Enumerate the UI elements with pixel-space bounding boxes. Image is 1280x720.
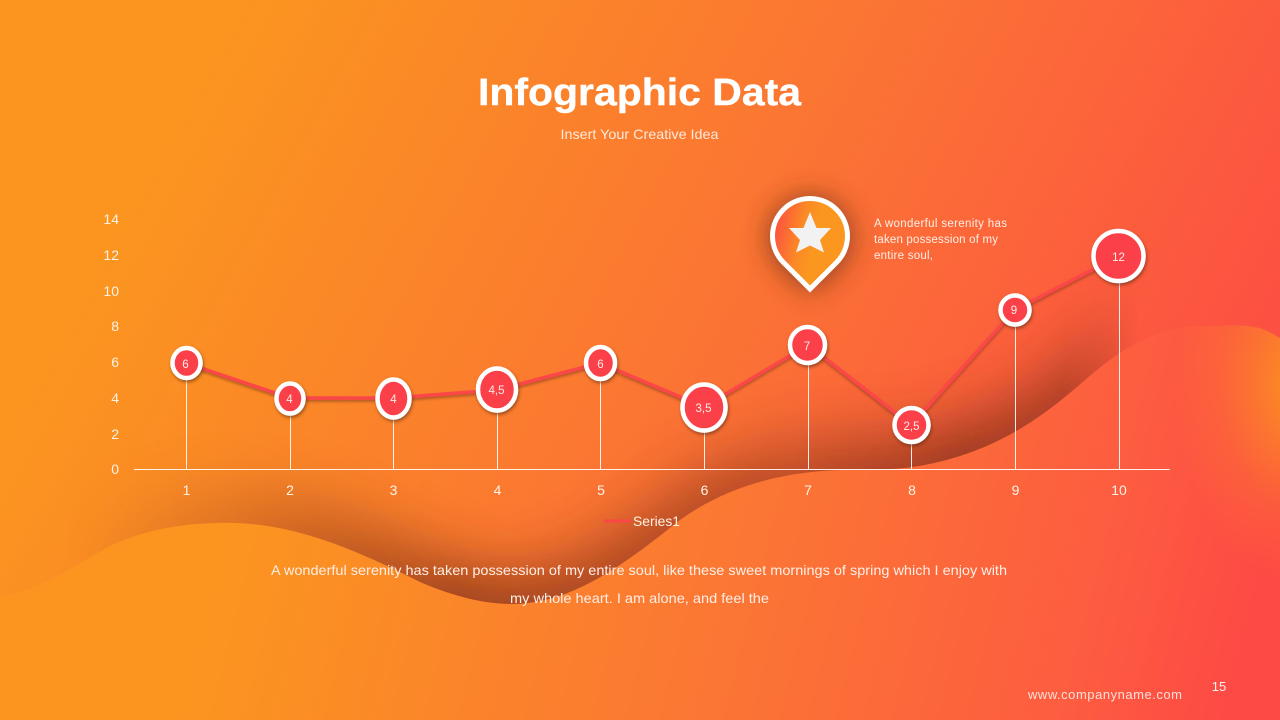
x axis labels: 4	[494, 482, 502, 498]
series line	[186, 256, 1119, 425]
x axis line	[134, 468, 1170, 470]
data labels: 6	[182, 359, 189, 371]
footer url: www.companyname.com	[1027, 687, 1182, 702]
legend	[604, 513, 680, 529]
callout text: taken possession of my	[874, 234, 998, 246]
x axis labels: 5	[597, 482, 605, 498]
y axis labels: 10	[103, 283, 119, 299]
wave right glow	[1085, 325, 1280, 620]
x axis labels: 9	[1012, 482, 1020, 498]
data labels: 7	[804, 341, 810, 353]
icon: map pin with star	[770, 198, 850, 292]
data labels: 4	[286, 394, 293, 406]
data labels: 3,5	[696, 403, 712, 415]
wave shadow	[118, 306, 1130, 604]
y axis labels: 12	[103, 247, 119, 263]
y axis labels: 2	[111, 426, 119, 442]
x axis labels: 3	[390, 482, 398, 498]
data labels: 12	[1112, 252, 1125, 264]
callout text	[874, 218, 1007, 262]
x axis labels: 10	[1111, 482, 1127, 498]
line chart	[103, 211, 1170, 529]
wave shape	[0, 325, 1280, 720]
data labels: 4,5	[488, 385, 504, 397]
callout text: entire soul,	[874, 250, 933, 262]
y axis labels: 14	[103, 211, 119, 227]
x axis labels: 2	[286, 482, 294, 498]
data labels: 2,5	[904, 421, 920, 433]
data markers	[172, 231, 1144, 442]
subtitle: Insert Your Creative Idea	[560, 126, 719, 142]
drop lines	[186, 256, 1120, 469]
data labels: 4	[390, 394, 397, 406]
body text: A wonderful serenity has taken possession of my entire soul, like these sweet mornings of spring which I enjoy with	[271, 562, 1007, 578]
page number: 15	[1212, 679, 1226, 694]
data labels: 9	[1011, 305, 1017, 317]
legend: Series1	[633, 513, 680, 529]
x axis labels: 6	[701, 482, 709, 498]
x axis labels: 1	[183, 482, 191, 498]
data labels	[182, 252, 1125, 433]
title: Infographic Data	[478, 72, 802, 114]
y axis labels: 0	[111, 461, 119, 477]
data labels: 6	[597, 359, 604, 371]
y axis labels: 8	[111, 318, 119, 334]
y axis labels	[103, 211, 119, 477]
body text	[271, 562, 1007, 606]
x axis labels: 8	[908, 482, 916, 498]
callout text: A wonderful serenity has	[874, 218, 1007, 230]
x axis labels: 7	[804, 482, 812, 498]
y axis labels: 4	[111, 390, 119, 406]
y axis labels: 6	[111, 354, 119, 370]
x axis labels	[183, 482, 1127, 498]
body text: my whole heart. I am alone, and feel the	[510, 590, 769, 606]
